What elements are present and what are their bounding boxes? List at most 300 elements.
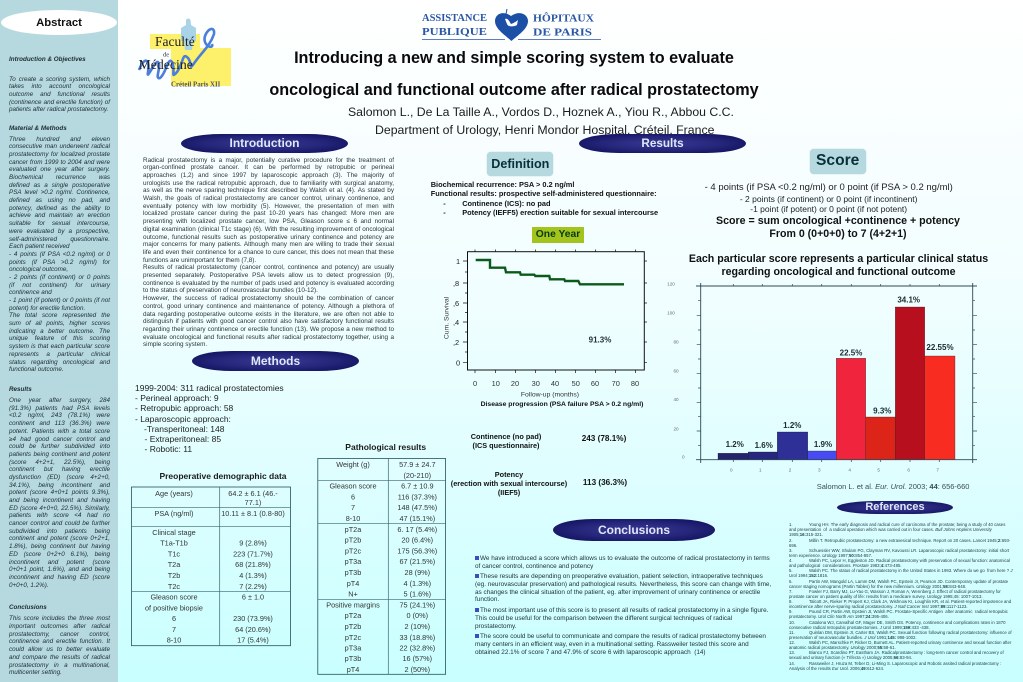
text: objectives bbox=[8, 76, 110, 113]
table: pathological results: pT4 bbox=[347, 579, 359, 588]
chart: score distribution bars: 120 bbox=[667, 282, 675, 286]
table: pathological results: Positive margins bbox=[326, 600, 380, 610]
heading: references: References bbox=[865, 501, 925, 513]
text: introduction: presenting with localized prostate cancer, low PSA, Gleason score ≤ 6 and normal bbox=[143, 218, 394, 225]
text: references list: Analysis of the results Eur Urol. 2006;49:612-624. bbox=[789, 666, 884, 671]
text: conclusions: prostatectomy. bbox=[475, 623, 516, 630]
text: references list: 10. bbox=[789, 620, 795, 625]
text: material and methods: represents a particular clinical bbox=[9, 351, 110, 358]
table: preoperative demographic data bbox=[131, 471, 291, 646]
text: results: potent. Patients with a total score bbox=[9, 428, 110, 435]
text: references list: 7. bbox=[789, 589, 793, 594]
table: preoperative demographic data: 77.1) bbox=[245, 498, 261, 507]
chart: score distribution bars: 0 bbox=[682, 455, 685, 460]
text: methods list: 1999-2004: 311 radical prostatectomies bbox=[135, 383, 284, 393]
table: pathological results: 67 (21.5%) bbox=[399, 557, 435, 566]
title bbox=[269, 49, 759, 99]
table: pathological results: (20-210) bbox=[404, 471, 431, 480]
table: pathological results: 57.9 ± 24.7 bbox=[399, 460, 436, 469]
label: score bbox=[810, 149, 866, 174]
table: pathological results: 4 (1.3%) bbox=[404, 579, 431, 588]
text: introduction bbox=[143, 156, 394, 348]
table: pathological results: 2 (50%) bbox=[405, 665, 430, 674]
logo: Faculté de Médecine Créteil: Médecine bbox=[138, 57, 193, 72]
table: pathological results: 75 (24.1%) bbox=[399, 600, 435, 610]
text: material and methods: points (if PSA >0.2 ng/ml) for bbox=[9, 259, 110, 266]
text: material and methods: sum of all points, higher scores bbox=[9, 320, 110, 327]
text: introduction: regarding their urinary continence or erectile function (13). We propose a new method to bbox=[143, 326, 394, 333]
text: conclusions: prostatectomy in a multinational, bbox=[9, 662, 110, 669]
logo: Assistance Publique Hôpitaux de Paris: PUBLIQUE bbox=[422, 27, 487, 38]
text: conclusions bbox=[475, 555, 771, 656]
table: pathological results: 16 (57%) bbox=[402, 654, 432, 663]
table: pathological results: 6. 17 (5.4%) bbox=[397, 525, 437, 534]
text: results: 34.1%), being incontinent and bbox=[9, 482, 110, 489]
table: pathological results: pT2c bbox=[345, 633, 361, 642]
chart: score distribution bars: 1.2% bbox=[783, 421, 801, 430]
text: results: 1.8%), being continent but having bbox=[9, 543, 110, 550]
text: references list: Bianco FJ, Scardino PT, Eastham JA. Radicalprostatectomy : long-term cancer control and recovery of bbox=[809, 650, 1004, 655]
table: preoperative demographic data: 64.2 ± 6.1 (46.- bbox=[228, 489, 278, 498]
chart: score distribution bars: 1 bbox=[759, 468, 762, 473]
table: preoperative demographic data: 8-10 bbox=[167, 636, 181, 644]
logo: Assistance Publique Hôpitaux de Paris bbox=[422, 8, 601, 41]
table: preoperative demographic data: 64 (20.6%) bbox=[235, 625, 271, 634]
table: pathological results: Gleason score bbox=[329, 482, 377, 490]
text: introduction: Radical prostatectomy is a major, potentially curative procedure for the treatment of bbox=[143, 156, 394, 164]
text: introduction: major concerns for many patients. Although many men are willing to trade their sexual bbox=[143, 241, 394, 248]
text: material and methods: achieve and maintain an erection bbox=[9, 212, 110, 219]
citation: Salomon L. et al. Eur. Urol. 2003; 44: 656-660 bbox=[817, 482, 969, 490]
table: pathological results: 22 (32.8%) bbox=[399, 644, 435, 652]
text: references list: and pathological considerations. Prostate 1983;4:473-485. bbox=[789, 563, 902, 568]
chart: score distribution bars: 1.2% bbox=[726, 440, 744, 449]
abstract heading: Abstract bbox=[36, 16, 82, 28]
text: references list: Walsh PC. The status of radical prostatectomy in the United States in 1993. Where do we go from here ? J bbox=[809, 568, 1012, 573]
chart: disease progression survival curve: 1 bbox=[456, 257, 460, 266]
text: results: <0.2 ng/ml, 243 (78.1%) were bbox=[9, 412, 110, 419]
chart: disease progression survival curve: Follow-up (months) bbox=[521, 392, 579, 398]
text: results: subdivided into patients being bbox=[9, 528, 110, 535]
text: references list: 12. bbox=[789, 640, 795, 645]
text: results: incontinent and potent (score bbox=[9, 559, 110, 566]
text: score rules: Score = sum oncological +continence + potency bbox=[716, 214, 960, 226]
text: material and methods: Each patient received bbox=[9, 243, 70, 250]
table: pathological results: pT3a bbox=[345, 557, 362, 566]
table: pathological results: N+ bbox=[348, 590, 358, 598]
text: definition details: Functional results: prospective self-administered questionnaire: bbox=[431, 189, 657, 198]
caption: disease progression: Disease progression (PSA failure PSA > 0.2 ng/ml) bbox=[481, 401, 643, 408]
text: score rules: - 4 points (if PSA <0.2 ng/ml) or 0 point (if PSA > 0.2 ng/ml) bbox=[705, 182, 953, 193]
chart: score distribution bars: 34.1% bbox=[897, 296, 920, 305]
table: preoperative demographic data: Clinical stage bbox=[152, 528, 196, 537]
text: material and methods: The total score represented the bbox=[9, 312, 110, 319]
text: conclusions: important outcomes after radical bbox=[9, 623, 110, 630]
value: continence: 243 (78.1%) bbox=[582, 434, 626, 443]
text: introduction: life and even their continence for a chance to cure cancer, this does not mean that these bbox=[143, 249, 394, 256]
table: pathological results: 47 (15.1%) bbox=[399, 514, 435, 523]
heading: results: Results bbox=[641, 137, 684, 150]
logo: Assistance Publique Hôpitaux de Paris: DE PARIS bbox=[533, 28, 592, 38]
text: introduction: organ-confined prostate cancer. It can be performed by retropubic or perineal bbox=[143, 164, 394, 171]
text: results: patients being continent and potent bbox=[9, 451, 110, 458]
chart: disease progression survival curve: Cum. Survival bbox=[444, 296, 450, 339]
text: references list: consecutive radical retropubic prostatectomies. J Urol 1999;159:433 -438. bbox=[789, 625, 930, 630]
text: definition details: Potency (IEFF5) erection suitable for sexual intercourse bbox=[462, 208, 658, 217]
text: introduction: Walsh, the goals of radical prostatectomy are cancer control, urinary continence, and bbox=[143, 195, 394, 202]
table: preoperative demographic data: 6 bbox=[172, 614, 176, 623]
label: continence bbox=[471, 432, 541, 450]
chart: disease progression survival curve: 10 bbox=[492, 379, 500, 388]
text: references list: 6. bbox=[789, 579, 793, 584]
text: methods list: - Perineal approach: 9 bbox=[135, 393, 219, 403]
text: introduction: eventually potency with low morbidity (5). However, the presentation of men with bbox=[143, 203, 394, 210]
table: preoperative demographic data: 10.11 ± 8.1 (0.8-80) bbox=[221, 509, 285, 518]
label: continence: Continence (no pad) bbox=[471, 432, 541, 441]
heading: references bbox=[837, 501, 953, 514]
text: definition details: - bbox=[443, 199, 446, 208]
text: introduction: urologists use the radical retropubic approach, due to familiarity with surgical anatomy, bbox=[143, 180, 394, 187]
text: objectives: patients after radical prostatectomy. bbox=[9, 106, 108, 113]
heading: methods: Methods bbox=[251, 354, 300, 368]
table: preoperative demographic data: Preoperative demographic data bbox=[159, 471, 287, 481]
table: pathological results bbox=[317, 442, 446, 675]
table: pathological results: 5 (1.6%) bbox=[404, 590, 431, 598]
table: pathological results: 7 bbox=[351, 503, 355, 512]
chart: disease progression survival curve: ,6 bbox=[453, 299, 459, 308]
text: references list: prostatectomy. Urol Clin North Am 1997;24:395-406. bbox=[789, 614, 889, 619]
text: material and methods: (if not continent) for urinary bbox=[9, 282, 110, 289]
chart: score distribution bars: 22.55% bbox=[926, 343, 954, 352]
table: pathological results: pT2a bbox=[345, 611, 362, 620]
text: references list: anatomic radical prostatectomy. Urology 2000;55:58-61. bbox=[789, 645, 896, 650]
chart: score distribution bars: 80 bbox=[673, 340, 679, 345]
text: references list: and presentation of a radical operation which was carried out in four cases. Bull Johns Hopkins University bbox=[789, 527, 992, 532]
table: pathological results: pT3b bbox=[345, 654, 361, 663]
table: preoperative demographic data: T1a-T1b bbox=[160, 538, 188, 548]
heading: chart title bbox=[689, 253, 988, 278]
label: potency: (IIEF5) bbox=[498, 488, 520, 497]
text: references list: Pound CR, Partin AW, Epstein JI, Walsh PC. Prostate-Specific Antigen after anatomic radical retropubic bbox=[809, 609, 1008, 614]
title: oncological and functional outcome after radical prostatectomy bbox=[269, 81, 759, 99]
chart: score distribution bars: 4 bbox=[848, 468, 851, 473]
label: continence: (ICS questionnaire) bbox=[473, 441, 539, 450]
text: results: could be further subdivided into bbox=[9, 443, 110, 450]
text: material and methods: evaluated one year after surgery. bbox=[9, 166, 110, 173]
text: references list: Young HH. The early diagnosis and radical cure of carcinoma of the prostate; being a study of 40 cases bbox=[809, 522, 1005, 527]
text: conclusions: The score could be useful to communicate and compare the results of radical prostatectomy between bbox=[480, 633, 766, 640]
logo: Faculté de Médecine Créteil: de bbox=[163, 52, 169, 58]
table: preoperative demographic data: 4 (1.3%) bbox=[239, 571, 267, 580]
table: pathological results: pT2b bbox=[345, 536, 361, 544]
text: references list: sexual and urinary function (« Trifecta ») Urology 2005;66:83-94. bbox=[789, 655, 912, 660]
logo: Assistance Publique Hôpitaux de Paris: ASSISTANCE bbox=[422, 13, 487, 24]
chart: score distribution bars: 0 bbox=[730, 468, 733, 473]
text: references list: Quinlan DM, Epstein JI, Carter BS, Walsh PC. Sexual function following radical prostatectomy: influence of bbox=[809, 630, 1012, 635]
text: results: ED (score 4+0+0, 22.5%). Similarly, bbox=[9, 505, 110, 512]
text: references list: prostate cancer on patient quality of life: results from a medicare survey. Urology 1995;45: 1007-1013. bbox=[789, 594, 983, 599]
label: potency bbox=[451, 470, 567, 497]
table: pathological results: pT2a bbox=[345, 525, 362, 534]
label: score: Score bbox=[816, 152, 859, 169]
text: conclusions: could allow us to better evaluate bbox=[9, 646, 110, 653]
text: references list: cancer staging nomograms (Partin Tables) for the new millennium. Urology 2001;58:843-848. bbox=[789, 584, 966, 589]
text: references list: Walsh PC, Lepor H, Eggleston JD. Radical prostatectomy with preservation of sexual function: anatomical bbox=[809, 558, 1010, 563]
chart: score distribution bars: 60 bbox=[673, 368, 679, 373]
text: material and methods: Three hundred and eleven bbox=[9, 136, 110, 143]
text: introduction: continence is evaluated by the number of pads used and potency is evaluated according bbox=[143, 280, 394, 287]
label: potency: (erection with sexual intercourse) bbox=[451, 479, 567, 488]
table: pathological results: 8-10 bbox=[346, 514, 360, 523]
panel: abstract sidebar bbox=[0, 0, 118, 682]
text: material and methods bbox=[8, 136, 110, 373]
chart: disease progression survival curve: 80 bbox=[631, 379, 639, 388]
chart: disease progression survival curve: 50 bbox=[572, 379, 580, 388]
chart: disease progression survival curve: 70 bbox=[612, 379, 620, 388]
text: results: ED (score 0+2+0 6.1%), being bbox=[9, 551, 110, 558]
text: references list: Catalona WJ, Carvalhal GF, Mager DE, Smith DS. Potency, continence and complications rates in 1870 bbox=[809, 620, 1005, 625]
text: material and methods: - 1 point (if potent) or 0 points (if not bbox=[9, 297, 110, 304]
text: introduction: to the status of preservation of neurovascular bundles (10-12). bbox=[143, 287, 318, 294]
text: results: dysfunction (ED) (score 4+2+0, bbox=[9, 474, 110, 481]
logo: Faculté de Médecine Créteil: Créteil Paris XII bbox=[171, 82, 221, 88]
text: introduction: functions are unimportant for them (7,8). bbox=[143, 257, 256, 264]
table: preoperative demographic data: 68 (21.8%) bbox=[235, 560, 271, 569]
logo: Assistance Publique Hôpitaux de Paris: HÔPITAUX bbox=[533, 12, 595, 24]
table: pathological results: Pathological results bbox=[345, 442, 426, 452]
logo: Faculté de Médecine Créteil: Faculté bbox=[155, 34, 195, 49]
text: introduction: outcome, functional results such as postoperative urinary continence and potency are bbox=[143, 234, 394, 241]
chart: score distribution bars: 100 bbox=[667, 310, 675, 316]
table: pathological results: 0 (0%) bbox=[407, 611, 428, 620]
text: results: and being incontinent and having bbox=[9, 497, 110, 504]
table: preoperative demographic data: Gleason score bbox=[150, 592, 198, 602]
text: references list: 9. bbox=[789, 609, 793, 614]
text: material and methods: Biochemical recurrence was bbox=[9, 174, 110, 181]
chart: score distribution bars: 7 bbox=[936, 468, 939, 473]
text: results: One year after surgery, 284 bbox=[9, 397, 110, 404]
chart: score distribution bars: 3 bbox=[818, 468, 821, 473]
table: preoperative demographic data: of positive biopsie bbox=[145, 604, 203, 612]
table: preoperative demographic data: T2c bbox=[168, 582, 180, 591]
table: pathological results: pT3b bbox=[345, 568, 361, 577]
text: objectives: To create a scoring system, which bbox=[9, 76, 110, 83]
text: conclusions: as changes the clinical situation of the patient, eg. after improvement of urinary continence or erectile bbox=[475, 589, 760, 596]
text: references list: 11. bbox=[789, 630, 795, 635]
text: material and methods: cancer from 1999 to 2004 and were bbox=[9, 159, 110, 166]
chart: disease progression survival curve: 30 bbox=[532, 379, 540, 388]
text: references list: 696. bbox=[789, 543, 797, 548]
text: methods list: - Retropubic approach: 58 bbox=[135, 403, 233, 413]
heading: material and methods: Material & Methods bbox=[9, 125, 67, 132]
text: conclusions: (eg. neurovascular preservation) and pathological results. Nevertheless, this score can change with time, bbox=[475, 581, 771, 588]
table: preoperative demographic data: 9 (2.8%) bbox=[239, 538, 267, 548]
text: conclusions: of cancer control, continence and potency bbox=[475, 563, 593, 570]
text: methods list: - Laparoscopic approach: bbox=[135, 414, 231, 424]
table: pathological results: 6.7 ± 10.9 bbox=[401, 482, 434, 490]
authors: Salomon L., De La Taille A., Vordos D., Hoznek A., Yiou R., Abbou C.C. bbox=[348, 105, 734, 119]
table: pathological results: 2 (10%) bbox=[405, 622, 430, 631]
text: material and methods: prostatectomy for localized prostate bbox=[9, 151, 110, 158]
text: material and methods: unique feature of this scoring bbox=[9, 335, 110, 342]
text: material and methods: system is that each particular score bbox=[9, 343, 110, 350]
text: conclusions: and compare the results of radical bbox=[9, 654, 110, 661]
table: preoperative demographic data: 17 (5.4%) bbox=[237, 636, 269, 644]
heading: introduction: Introduction bbox=[230, 136, 299, 150]
text: results: continent but having erectile bbox=[9, 466, 110, 473]
text: references list: Urol 1994;152:1816. bbox=[789, 573, 828, 578]
label: one year: One Year bbox=[536, 229, 580, 240]
chart: disease progression survival curve: ,4 bbox=[453, 318, 459, 327]
chart: score distribution bars: 9.3% bbox=[873, 406, 891, 415]
label: definition: Definition bbox=[491, 157, 549, 171]
table: pathological results: 148 (47.5%) bbox=[397, 503, 437, 512]
chart: score distribution bars: 22.5% bbox=[840, 349, 862, 358]
text: conclusions: function. bbox=[475, 596, 499, 603]
text: objectives: takes into account oncological bbox=[9, 83, 110, 90]
value: potency: 113 (36.3%) bbox=[583, 478, 627, 487]
chart: disease progression survival curve: 60 bbox=[591, 379, 599, 388]
text: conclusions: multicenter setting. bbox=[9, 669, 62, 676]
text: references list: 8. bbox=[789, 599, 793, 604]
table: pathological results: 28 (9%) bbox=[405, 568, 430, 577]
table: preoperative demographic data: 7 (2.2%) bbox=[239, 582, 267, 591]
text: definition details bbox=[431, 180, 658, 217]
heading: conclusions: Conclusions bbox=[9, 604, 47, 611]
table: pathological results: 33 (18.8%) bbox=[399, 633, 435, 642]
text: material and methods: - 2 points (if continent) or 0 points bbox=[9, 274, 110, 281]
text: results: 0+0+0, 1.2%). bbox=[9, 582, 49, 589]
text: references list: 1. bbox=[789, 522, 793, 527]
text: material and methods: self-administered questionnaire. bbox=[9, 236, 110, 243]
text: conclusions: We have introduced a score which allows us to evaluate the outcome of radical prostatectomy in terms bbox=[480, 555, 770, 562]
text: methods list: - Extraperitoneal: 85 bbox=[144, 434, 221, 444]
text: references list: incontinence after nerve-sparing radical prostatectomy. J Natl Cancer Inst 1997;89:1117-1123. bbox=[789, 604, 968, 609]
table: preoperative demographic data: 223 (71.7%) bbox=[233, 550, 273, 558]
text: definition details: Biochemical recurrence: PSA > 0.2 ng/ml bbox=[431, 180, 574, 189]
heading: methods bbox=[192, 351, 359, 371]
text: conclusions: prostatectomy, cancer control, bbox=[9, 631, 110, 638]
text: references list: term experience. Urology 1997;50:854-857. bbox=[789, 553, 872, 558]
text: material and methods: oncological outcome, bbox=[9, 266, 68, 273]
chart: disease progression survival curve: ,2 bbox=[453, 338, 459, 347]
text: conclusions: The most important use of this score is to present all results of radical prostatectomy in a single figure. bbox=[480, 607, 768, 614]
text: results: (91.3%) patients had PSA levels bbox=[9, 405, 110, 412]
text: material and methods: functional outcome. bbox=[9, 366, 64, 373]
text: results: continent and 113 (36.3%) were bbox=[9, 420, 110, 427]
text: material and methods: indicating a better outcome. The bbox=[9, 328, 110, 335]
text: introduction: distinguish if patients with good cancer control also have satisfactory functional results bbox=[143, 318, 394, 325]
table: pathological results: Weight (g) bbox=[336, 460, 370, 469]
text: introduction: However, the success of radical prostatectomy should be the combination of cancer bbox=[143, 295, 394, 302]
chart: disease progression survival curve bbox=[444, 250, 647, 398]
text: objectives: outcome and functional results bbox=[9, 91, 110, 98]
text: material and methods: potency, defined as the ability to bbox=[9, 205, 110, 212]
text: references list: 5. bbox=[789, 568, 793, 573]
text: results: cancer control and could be further bbox=[9, 520, 110, 527]
table: preoperative demographic data: 6 ± 1.0 bbox=[242, 592, 264, 602]
text: results: continent and potent (score 0+2+1, bbox=[9, 535, 110, 542]
table: pathological results: pT3a bbox=[345, 644, 362, 652]
text: conclusions: continence and erectile function. It bbox=[9, 638, 110, 645]
text: introduction: data regarding postoperative outcome exists in the literature, we are often not able to bbox=[143, 311, 394, 318]
heading: introduction and objectives: Introduction & Objectives bbox=[9, 56, 86, 63]
text: methods list: - Robotic: 11 bbox=[144, 444, 192, 454]
text: material and methods: were evaluated by a prospective, bbox=[9, 228, 110, 235]
text: results: potent (score 4+0+1 points 9.3%), bbox=[9, 489, 110, 496]
text: introduction: digital examination (clinical T1c stage) (6). With the resulting improvement of oncological bbox=[143, 226, 394, 233]
text: references list: preservation of neurovascular bundles. J Urol 1991;145: 998-1002. bbox=[789, 635, 917, 640]
text: references list: 13. bbox=[789, 650, 795, 655]
text: conclusions bbox=[8, 615, 110, 676]
text: score rules: -1 point (if potent) or 0 point (if not potent) bbox=[750, 204, 907, 214]
chart: score distribution bars: 40 bbox=[673, 397, 679, 402]
chart: score distribution bars: 1.9% bbox=[814, 440, 832, 449]
text: references list: Rassweiler J, Hruza M, Teber D, Li-Ming S. Laparoscopic and Robotic assited radical prostatectomy : bbox=[809, 661, 1001, 666]
table: preoperative demographic data: 230 (73.9%) bbox=[233, 614, 273, 623]
text: objectives: (continence and erectile function) of bbox=[9, 99, 110, 106]
text: references list bbox=[789, 522, 1012, 671]
chart: score distribution bars: 5 bbox=[877, 468, 880, 473]
text: material and methods: defined as a single postoperative bbox=[9, 182, 110, 189]
chart: score distribution bars: 6 bbox=[907, 468, 910, 473]
text: results: 0+0+1 point, 1.6%), and and being bbox=[9, 566, 110, 573]
text: conclusions: obtained 22.1% of score 7 and 47.9% of score 6 with laparoscopic approach (14) bbox=[475, 649, 706, 656]
table: pathological results: pT2b bbox=[345, 622, 361, 631]
text: score rules bbox=[705, 182, 960, 240]
abstract heading bbox=[1, 10, 117, 35]
text: references list: Millin T. Retropubic prostatectomy: a new extravesical technique. Report on 20 cases. Lancet 1945;2:693- bbox=[809, 538, 1010, 543]
table: preoperative demographic data: 7 bbox=[172, 625, 176, 634]
text: references list: 4. bbox=[789, 558, 793, 563]
text: results bbox=[8, 397, 110, 589]
text: references list: 1905;16:315-321. bbox=[789, 532, 823, 537]
chart: disease progression survival curve: 0 bbox=[456, 358, 460, 368]
text: introduction: control, good urinary continence and maintenance of potency. Although a plethora of bbox=[143, 303, 394, 310]
table: pathological results: pT4 bbox=[347, 665, 359, 674]
heading: chart title: Each particular score represents a particular clinical status bbox=[689, 253, 988, 265]
heading: introduction bbox=[181, 134, 348, 153]
chart: disease progression survival curve: 0 bbox=[473, 379, 477, 388]
table: pathological results: 175 (56.3%) bbox=[397, 546, 437, 556]
text: introduction: Results of radical prostatectomy (cancer control, continence and potency) are usually bbox=[143, 264, 394, 271]
chart: score distribution bars: 1.6% bbox=[755, 441, 773, 450]
text: material and methods: PSA level >0.2 ng/ml. Continence, bbox=[9, 189, 110, 196]
text: results: (score 4+2+1, 22.5%), being bbox=[9, 459, 110, 466]
label: definition bbox=[487, 152, 553, 176]
table: preoperative demographic data: T1c bbox=[168, 550, 180, 558]
text: methods list: -Transperitoneal: 148 bbox=[144, 424, 224, 434]
table: preoperative demographic data: Age (years) bbox=[155, 489, 193, 498]
text: references list: 2. bbox=[789, 538, 793, 543]
table: pathological results: 116 (37.3%) bbox=[398, 492, 437, 502]
text: material and methods: status regarding oncological and bbox=[9, 359, 110, 366]
table: pathological results: 6 bbox=[351, 492, 355, 502]
affiliation: Department of Urology, Henri Mondor Hospital, Créteil, France bbox=[375, 123, 714, 137]
chart: score distribution bars: 2 bbox=[789, 468, 792, 473]
text: material and methods: - 4 points (if PSA <0.2 ng/ml) or 0 bbox=[9, 251, 110, 258]
heading: results bbox=[579, 134, 746, 153]
heading: conclusions: Conclusions bbox=[598, 523, 670, 537]
heading: conclusions bbox=[553, 519, 715, 541]
text: introduction: presented separately. Postoperative PSA levels allow us to detect progression (9), bbox=[143, 272, 394, 279]
text: conclusions: many centers in an efficient way, even in a multinational setting. Rassweiler tested this score and bbox=[475, 641, 749, 648]
heading: chart title: regarding oncological and functional outcome bbox=[721, 266, 956, 278]
text: introduction: localized prostate cancer during the past 10-20 years has changed: More men are bbox=[143, 210, 394, 217]
text: references list: Fowler FJ, Barry MJ, Lu-Yao G, Wasson J, Roman A, Wennberg J. Effect of radical prostatectomy for bbox=[809, 589, 1001, 594]
text: references list: Walsh PC, Marschke P, Ricker D, Burnett AL. Patient-reported urinary continence and sexual function after bbox=[809, 640, 1011, 645]
text: introduction: evaluate oncological and functional results after radical prostatectomy together, using a bbox=[143, 334, 394, 341]
